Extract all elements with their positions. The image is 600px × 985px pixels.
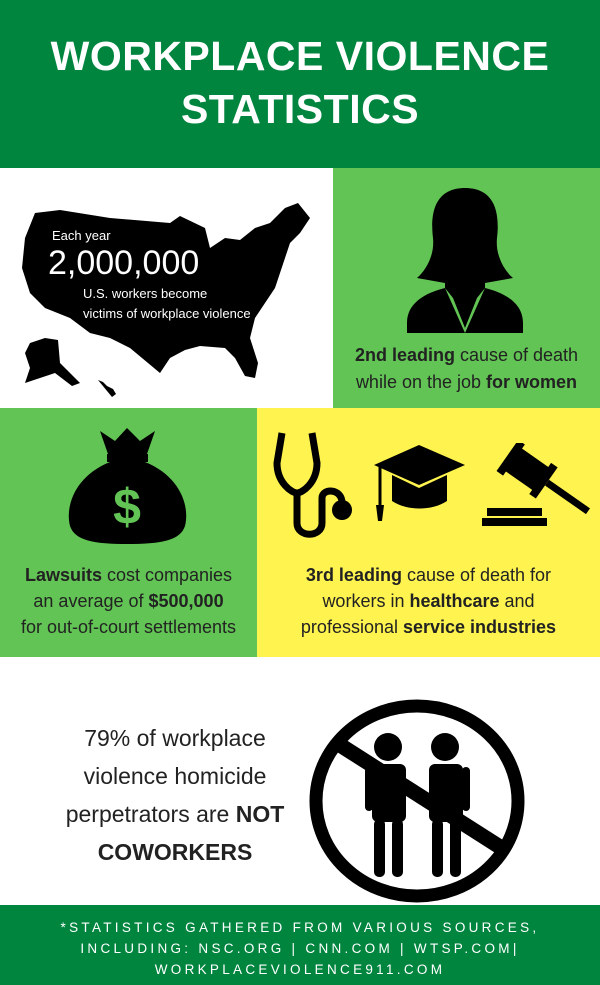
text: 3rd leading: professional service industries — [301, 617, 556, 637]
text: lawsuits: for out-of-court settlements — [21, 617, 236, 637]
footer — [0, 905, 600, 985]
panel: US map — [0, 168, 333, 408]
text: 3rd leading: 3rd leading cause of death for — [306, 565, 551, 585]
text: 79% — [66, 725, 284, 865]
icon: no coworkers sign — [310, 700, 524, 902]
text: 79%: perpetrators are NOT — [66, 801, 284, 827]
text: 2nd leading: 2nd leading cause of death — [355, 345, 578, 365]
icon: gavel — [482, 443, 590, 526]
text: US workers — [83, 286, 251, 321]
panel: coworkers — [0, 657, 600, 905]
text: lawsuits: Lawsuits cost companies — [25, 565, 232, 585]
text: sources: WORKPLACEVIOLENCE911.COM — [155, 962, 445, 977]
text: each year: Each year — [52, 228, 111, 243]
icon: money bag: $ — [113, 479, 141, 535]
text: 2,000,000: 2,000,000 — [48, 244, 199, 282]
text: 2nd leading — [355, 345, 578, 392]
text: US workers: U.S. workers become — [83, 286, 207, 301]
icon: woman silhouette — [407, 188, 523, 333]
title — [50, 33, 549, 132]
icon: graduation cap — [374, 445, 465, 521]
text: 3rd leading — [301, 565, 556, 637]
panel: healthcare — [257, 408, 600, 657]
title: STATISTICS — [181, 86, 419, 132]
text: 2nd leading: while on the job for women — [356, 372, 577, 392]
icon: stethoscope — [274, 432, 352, 538]
text: sources: *STATISTICS GATHERED FROM VARIOUS SOURCES, — [61, 920, 539, 935]
text: 79%: violence homicide — [84, 763, 266, 789]
text: lawsuits: an average of $500,000 — [33, 591, 224, 611]
icon: US map — [22, 203, 310, 397]
text: sources — [60, 920, 539, 977]
panel: women — [333, 168, 600, 408]
icon: money bag — [68, 428, 186, 544]
text: US workers: victims of workplace violence — [83, 306, 251, 321]
text: 79%: 79% of workplace — [84, 725, 266, 751]
text: 79%: COWORKERS — [98, 839, 252, 865]
panel: lawsuits — [0, 408, 257, 657]
text: lawsuits — [21, 565, 236, 637]
text: sources: INCLUDING: NSC.ORG | CNN.COM | WTSP.COM| — [80, 941, 520, 956]
text: 3rd leading: workers in healthcare and — [322, 591, 535, 611]
title: WORKPLACE VIOLENCE — [51, 33, 549, 79]
header — [0, 0, 600, 168]
